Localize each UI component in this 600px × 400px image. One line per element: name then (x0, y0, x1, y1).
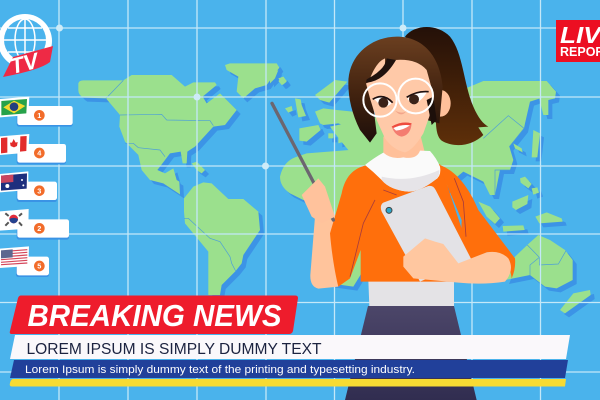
right arm and hand (403, 238, 511, 284)
fringe (370, 58, 385, 78)
eyes (373, 92, 429, 108)
collar (365, 151, 440, 192)
right sleeve (438, 165, 515, 278)
rank row: Brazil (0, 97, 73, 127)
ticker text: Lorem Ipsum is simply dummy text of the printing and typesetting industry. (25, 364, 415, 376)
nose (395, 110, 407, 114)
world map (78, 63, 595, 317)
pointer stick (272, 103, 333, 220)
yellow bar (10, 379, 566, 386)
ear (431, 90, 451, 117)
news ticker (10, 296, 570, 386)
rank row: Canada: 4 (37, 149, 42, 158)
rank row: USA (0, 246, 49, 277)
left hand (302, 178, 335, 223)
presenter (272, 27, 515, 400)
torso (330, 164, 470, 287)
neck (383, 133, 427, 160)
face (366, 60, 433, 152)
country rank list (0, 97, 73, 277)
camera (386, 207, 392, 213)
tablet (381, 186, 472, 282)
rank row: Australia (0, 171, 57, 202)
logo: globe TV (0, 14, 53, 79)
headline: BREAKING NEWS (28, 298, 282, 333)
hair (348, 37, 443, 143)
rank row: South Korea (0, 209, 69, 240)
sub headline: LOREM IPSUM IS SIMPLY DUMMY TEXT (26, 341, 322, 358)
rank row: USA: 5 (37, 262, 41, 271)
red headline banner (10, 296, 298, 334)
mouth (392, 123, 412, 137)
rank row: South Korea: 2 (37, 224, 41, 233)
skirt (345, 306, 477, 400)
ponytail (405, 27, 488, 145)
waist band (368, 280, 454, 306)
glasses (363, 79, 433, 117)
rank row: Canada (0, 134, 66, 164)
blue bar (10, 360, 568, 378)
live report badge (556, 20, 600, 62)
left forearm (310, 217, 338, 289)
rank row: Australia: 3 (37, 186, 41, 195)
rank row: Brazil: 1 (37, 111, 41, 120)
white bar (10, 335, 570, 359)
logo: globe TV: TV (8, 47, 43, 79)
